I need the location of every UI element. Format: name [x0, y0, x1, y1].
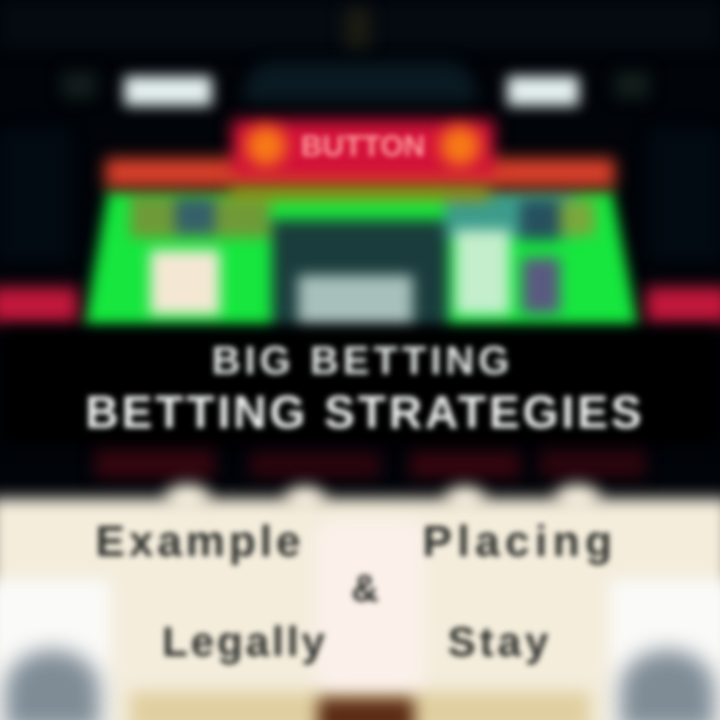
- icon: right white lights: [507, 76, 579, 106]
- heading: line two: BETTING STRATEGIES: [85, 386, 645, 438]
- text: top right word: Placing: [422, 517, 618, 566]
- center card: [315, 520, 425, 690]
- icon: bottom center dark shape: [318, 698, 414, 720]
- panel: dark stage header: [10, 3, 710, 246]
- red and orange strip: [105, 158, 615, 188]
- panel: green game board: [0, 145, 720, 334]
- banner: red title: BUTTON: [301, 130, 425, 163]
- icon: bottom left figure: [5, 650, 100, 720]
- text: top left word: Example: [96, 517, 304, 566]
- icon: left white lights: [124, 76, 212, 106]
- right red side band: [646, 287, 720, 323]
- icon: bottom right figure: [620, 650, 715, 720]
- heading: line one: BIG BETTING: [212, 339, 513, 383]
- text: bottom left word: Legally: [162, 618, 328, 665]
- panel: dark headline background: [0, 316, 720, 485]
- banner: red title: [218, 107, 508, 187]
- left red side band: [0, 287, 78, 323]
- text: bottom right word: Stay: [448, 618, 552, 665]
- text: ampersand: &: [351, 568, 379, 610]
- panel: cream lower section: [0, 472, 720, 720]
